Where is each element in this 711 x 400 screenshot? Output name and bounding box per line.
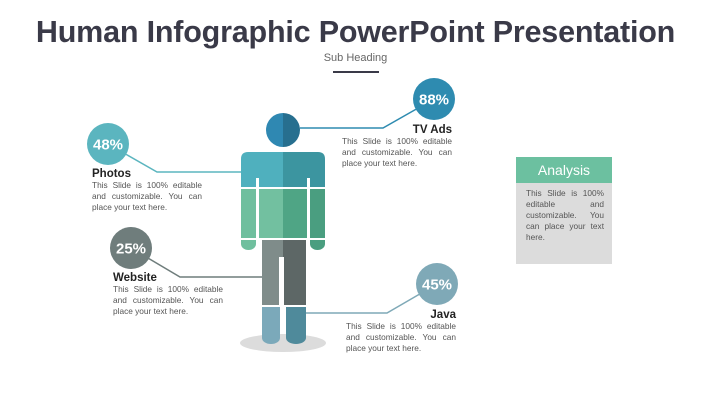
figure (240, 113, 326, 352)
circle: 88% (413, 78, 455, 120)
text block: Java: This Slide is 100% editable and customizable. You can place your text here. (346, 321, 456, 353)
analysis header (516, 157, 612, 183)
analysis header: Analysis (538, 162, 590, 178)
text block: TV Ads: This Slide is 100% editable and customizable. You can place your text here. (342, 136, 452, 168)
text block: Website: This Slide is 100% editable and customizable. You can place your text here. (113, 284, 223, 316)
text block: TV Ads: TV Ads (413, 124, 452, 136)
circle: 45% (416, 263, 458, 305)
connectors (108, 99, 437, 313)
analysis text: This Slide is 100% editable and customizable. You can place your text here. (526, 188, 604, 242)
text block: Photos: Photos (92, 168, 131, 180)
text block: Photos: This Slide is 100% editable and customizable. You can place your text here. (92, 180, 202, 212)
text block: Java: Java (430, 309, 456, 321)
divider under subheading (333, 71, 379, 73)
circle: 45%: 45% (422, 276, 452, 294)
circle: 48%: 48% (93, 136, 123, 154)
circle: 48% (87, 123, 129, 165)
circle: 88%: 88% (419, 92, 449, 108)
text block: Website: Website (113, 272, 157, 284)
subheading: Sub Heading (324, 52, 387, 64)
circle: 25% (110, 227, 152, 269)
circle: 25%: 25% (116, 240, 146, 258)
title: Human Infographic PowerPoint Presentation (36, 15, 675, 49)
panel: analysis (516, 157, 612, 264)
